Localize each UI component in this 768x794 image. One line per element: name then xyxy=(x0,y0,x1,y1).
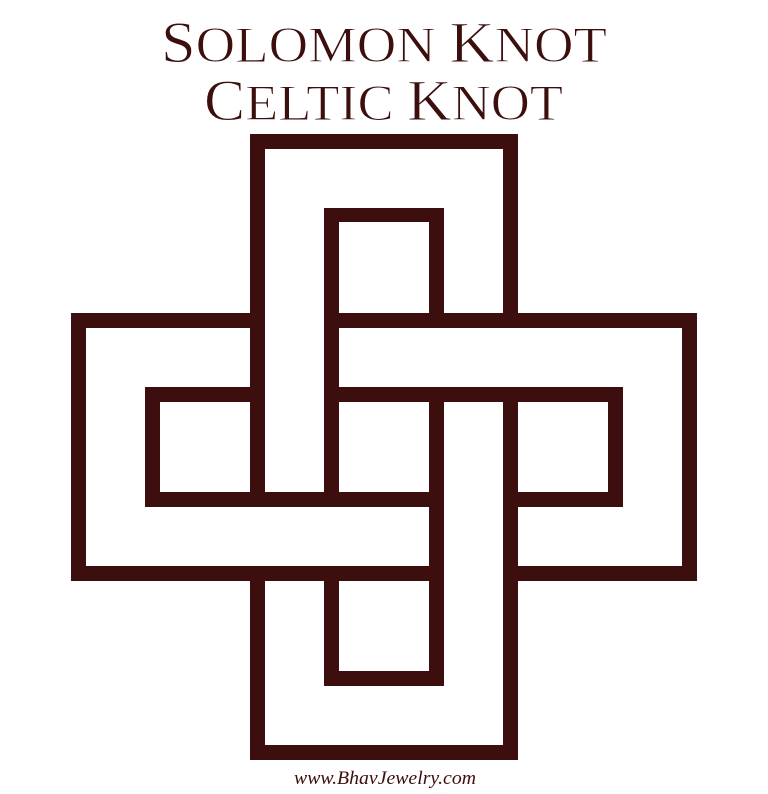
top loop xyxy=(250,134,518,507)
right loop xyxy=(324,313,697,581)
title line 1: SOLOMON KNOT xyxy=(161,10,607,75)
left loop xyxy=(71,313,444,581)
bottom loop xyxy=(250,387,518,760)
title line 2: CELTIC KNOT xyxy=(204,68,563,133)
Solomon knot diagram xyxy=(71,134,697,760)
title: Solomon Knot / Celtic Knot xyxy=(161,10,607,133)
footer website text: www.BhavJewelry.com xyxy=(294,768,476,789)
